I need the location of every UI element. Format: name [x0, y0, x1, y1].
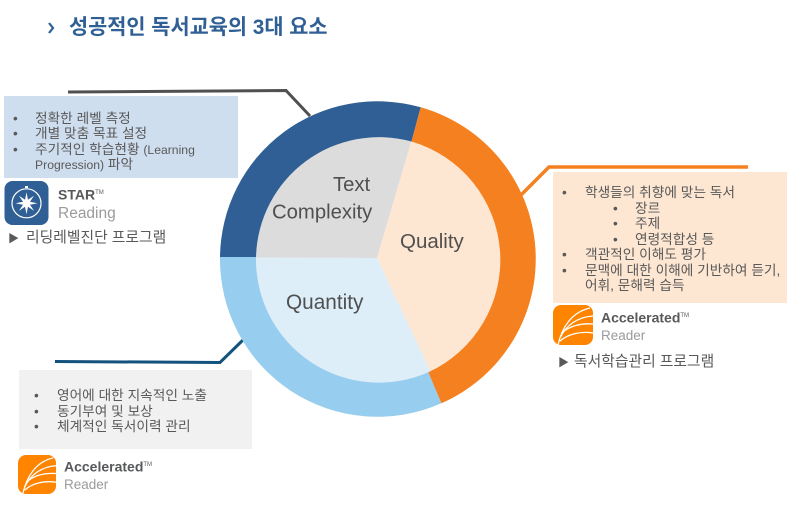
bullet list: •	[613, 216, 618, 231]
bullet list: 학생들의 취향에 맞는 독서	[585, 185, 735, 200]
bullet list	[34, 388, 207, 434]
bullet list: 영어에 대한 지속적인 노출	[57, 388, 207, 403]
logo text: star reading	[58, 187, 116, 222]
logo text: accelerated reader right	[601, 310, 689, 343]
bullet list: •	[34, 419, 39, 434]
panel: star reading	[4, 96, 238, 178]
caption: accelerated reader: ▶	[558, 357, 569, 369]
bullet list: 장르	[635, 200, 660, 216]
bullet list: •	[34, 388, 39, 403]
bullet list: •	[13, 110, 18, 126]
bullet list: •	[34, 404, 39, 418]
bullet list: Progression) 파악	[35, 157, 133, 172]
bullet list: 개별 맞춤 목표 설정	[35, 126, 147, 141]
title: 성공적인 독서교육의 3대 요소	[69, 16, 328, 39]
logo text: accelerated reader bottom: AcceleratedTM	[64, 459, 152, 475]
bullet list: 문맥에 대한 이해에 기반하여 듣기,	[585, 262, 780, 278]
bullet list: 객관적인 이해도 평가	[585, 247, 706, 262]
bullet list: •	[613, 232, 618, 246]
bullet list: •	[613, 200, 618, 216]
bullet list: 주기적인 학습현황 (Learning	[35, 142, 195, 156]
logo text: accelerated reader bottom: Reader	[64, 477, 108, 492]
bullet list: 연령적합성 등	[635, 232, 714, 246]
caption: star reading: ▶	[8, 233, 19, 245]
label: quantity: Quantity	[286, 291, 364, 314]
bullet list	[562, 185, 780, 293]
logo text: accelerated reader right: AcceleratedTM	[601, 310, 689, 326]
panel: quantity	[19, 370, 252, 449]
bullet list: 체계적인 독서이력 관리	[57, 419, 191, 434]
logo text: accelerated reader bottom	[64, 459, 152, 492]
bullet list: •	[13, 126, 18, 141]
bullet list: •	[562, 185, 567, 200]
bullet list: •	[562, 247, 567, 262]
logo text: accelerated reader right: Reader	[601, 328, 645, 343]
logo text: star reading: Reading	[58, 205, 116, 222]
bullet list: •	[562, 262, 567, 278]
ring segment: quality	[412, 107, 536, 403]
ring segment: text complexity	[220, 101, 421, 257]
label: text complexity: Text	[333, 174, 371, 196]
label: text complexity	[272, 174, 373, 224]
donut chart	[220, 101, 536, 417]
bullet list: 정확한 레벨 측정	[35, 110, 131, 126]
bullet list: •	[13, 142, 18, 156]
panel: quality	[553, 172, 787, 303]
caption: accelerated reader: 독서학습관리 프로그램	[574, 354, 714, 370]
caption: star reading: 리딩레벨진단 프로그램	[26, 230, 166, 246]
bullet list	[13, 110, 195, 172]
inner wedges	[256, 126, 500, 384]
logo text: star reading: STARTM	[58, 187, 104, 203]
bullet list: 동기부여 및 보상	[57, 404, 153, 418]
label: text complexity: Complexity	[272, 202, 373, 224]
bullet list: 어휘, 문해력 습득	[585, 278, 685, 293]
ring segment: quantity	[220, 257, 441, 417]
label: quality: Quality	[400, 230, 465, 253]
bullet list: 주제	[635, 216, 660, 231]
